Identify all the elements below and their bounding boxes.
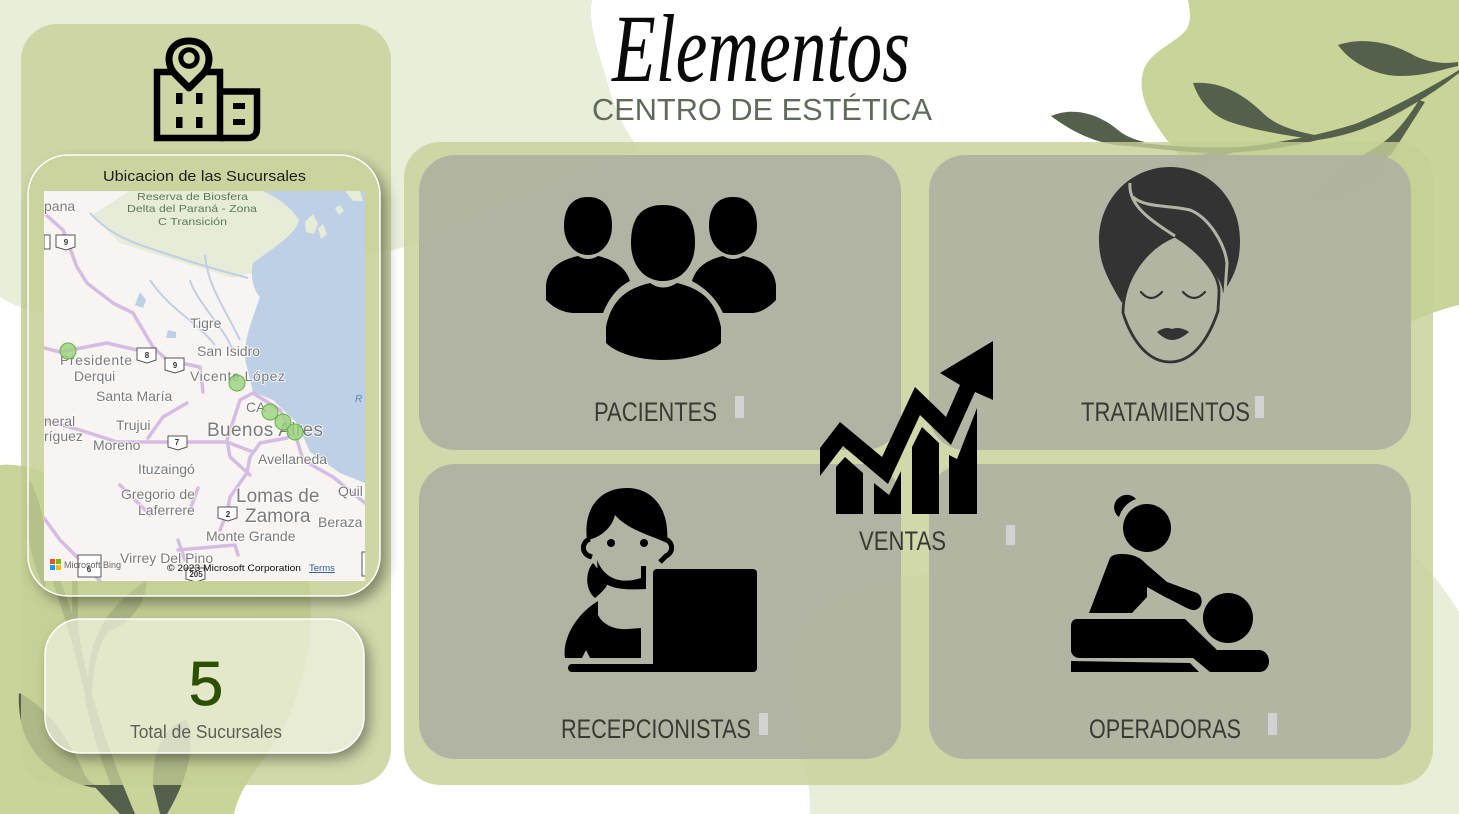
leaves: top right branch [1051, 41, 1459, 200]
label: ventas: VENTAS [859, 526, 946, 556]
map place labels: Vicente López [190, 368, 285, 384]
panel: left sidebar [21, 24, 391, 785]
map place labels: Moreno [93, 437, 141, 453]
map markers [60, 343, 303, 440]
map route shields: 2 [226, 510, 231, 519]
map place labels: San Isidro [197, 343, 260, 359]
map place labels: Zamora [245, 506, 311, 527]
card: operadoras [929, 464, 1411, 759]
map heading: Ubicacion de las Sucursales [103, 168, 306, 185]
label: recepcionistas: RECEPCIONISTAS [561, 714, 751, 744]
shadow: map card [34, 162, 386, 603]
kpi label: Total de Sucursales [130, 722, 282, 742]
map route shields [44, 235, 368, 582]
map place labels: Santa María [96, 388, 172, 404]
map place labels [44, 191, 363, 566]
map place labels: Virrey Del Pino [120, 550, 213, 566]
map route shields: 7 [175, 438, 180, 447]
map place labels: Gregorio de [121, 486, 195, 502]
map place labels: pana [44, 198, 75, 214]
small indicator markers [735, 396, 1277, 735]
map place labels: Buenos Aires [207, 420, 323, 441]
map attribution [50, 394, 362, 574]
panel: map card [28, 155, 380, 596]
map place labels: Quil [338, 483, 363, 499]
map [44, 191, 368, 582]
map place labels: Beraza [318, 514, 363, 530]
label: pacientes: PACIENTES [594, 397, 717, 427]
map attribution: © 2023 Microsoft Corporation [167, 563, 301, 574]
icon: face with towel [1099, 167, 1240, 362]
shadow: total card [50, 625, 369, 759]
subtitle: CENTRO DE ESTÉTICA [592, 92, 932, 127]
map place labels: Lomas de [236, 486, 319, 507]
leaves: bottom left plant [19, 480, 191, 814]
map route shields: 9 [64, 238, 69, 247]
map place labels: ríguez [44, 428, 83, 444]
map place labels: neral [44, 413, 75, 429]
map attribution: R [355, 394, 362, 405]
map attribution: Terms [309, 563, 335, 574]
panel: main background [404, 142, 1433, 785]
icon: sales growth chart [820, 341, 993, 514]
map place labels: Laferrere [138, 502, 195, 518]
icon: massage therapist [1071, 495, 1269, 672]
map place labels: Reserva de Biosfera [137, 191, 248, 203]
map route shields: 8 [145, 351, 150, 360]
panel: total branches card [45, 619, 364, 753]
map place labels: Delta del Paraná - Zona [127, 203, 257, 215]
map place labels: Ituzaingó [138, 461, 195, 477]
map route shields: 6 [87, 565, 92, 574]
card: recepcionistas [419, 464, 901, 759]
label: operadoras: OPERADORAS [1089, 714, 1241, 744]
map place labels: Tigre [190, 315, 222, 331]
map place labels: CA [246, 399, 266, 415]
map place labels: Derqui [74, 368, 115, 384]
icon: receptionist at laptop [565, 488, 757, 672]
label: tratamientos: TRATAMIENTOS [1081, 397, 1250, 427]
icon: building with pin [157, 41, 257, 138]
card: pacientes [419, 155, 901, 450]
map attribution: Microsoft Bing [64, 560, 121, 570]
map route shields: 205 [189, 570, 203, 579]
kpi value: 5 [189, 650, 223, 719]
map place labels: Trujui [116, 417, 150, 433]
map route shields: 9 [173, 361, 178, 370]
map place labels: Avellaneda [258, 451, 327, 467]
card: tratamientos [929, 155, 1411, 450]
map place labels: Presidente [60, 352, 132, 368]
icon: patients group [546, 197, 776, 360]
map place labels: Monte Grande [206, 528, 296, 544]
map place labels: C Transición [158, 216, 227, 228]
